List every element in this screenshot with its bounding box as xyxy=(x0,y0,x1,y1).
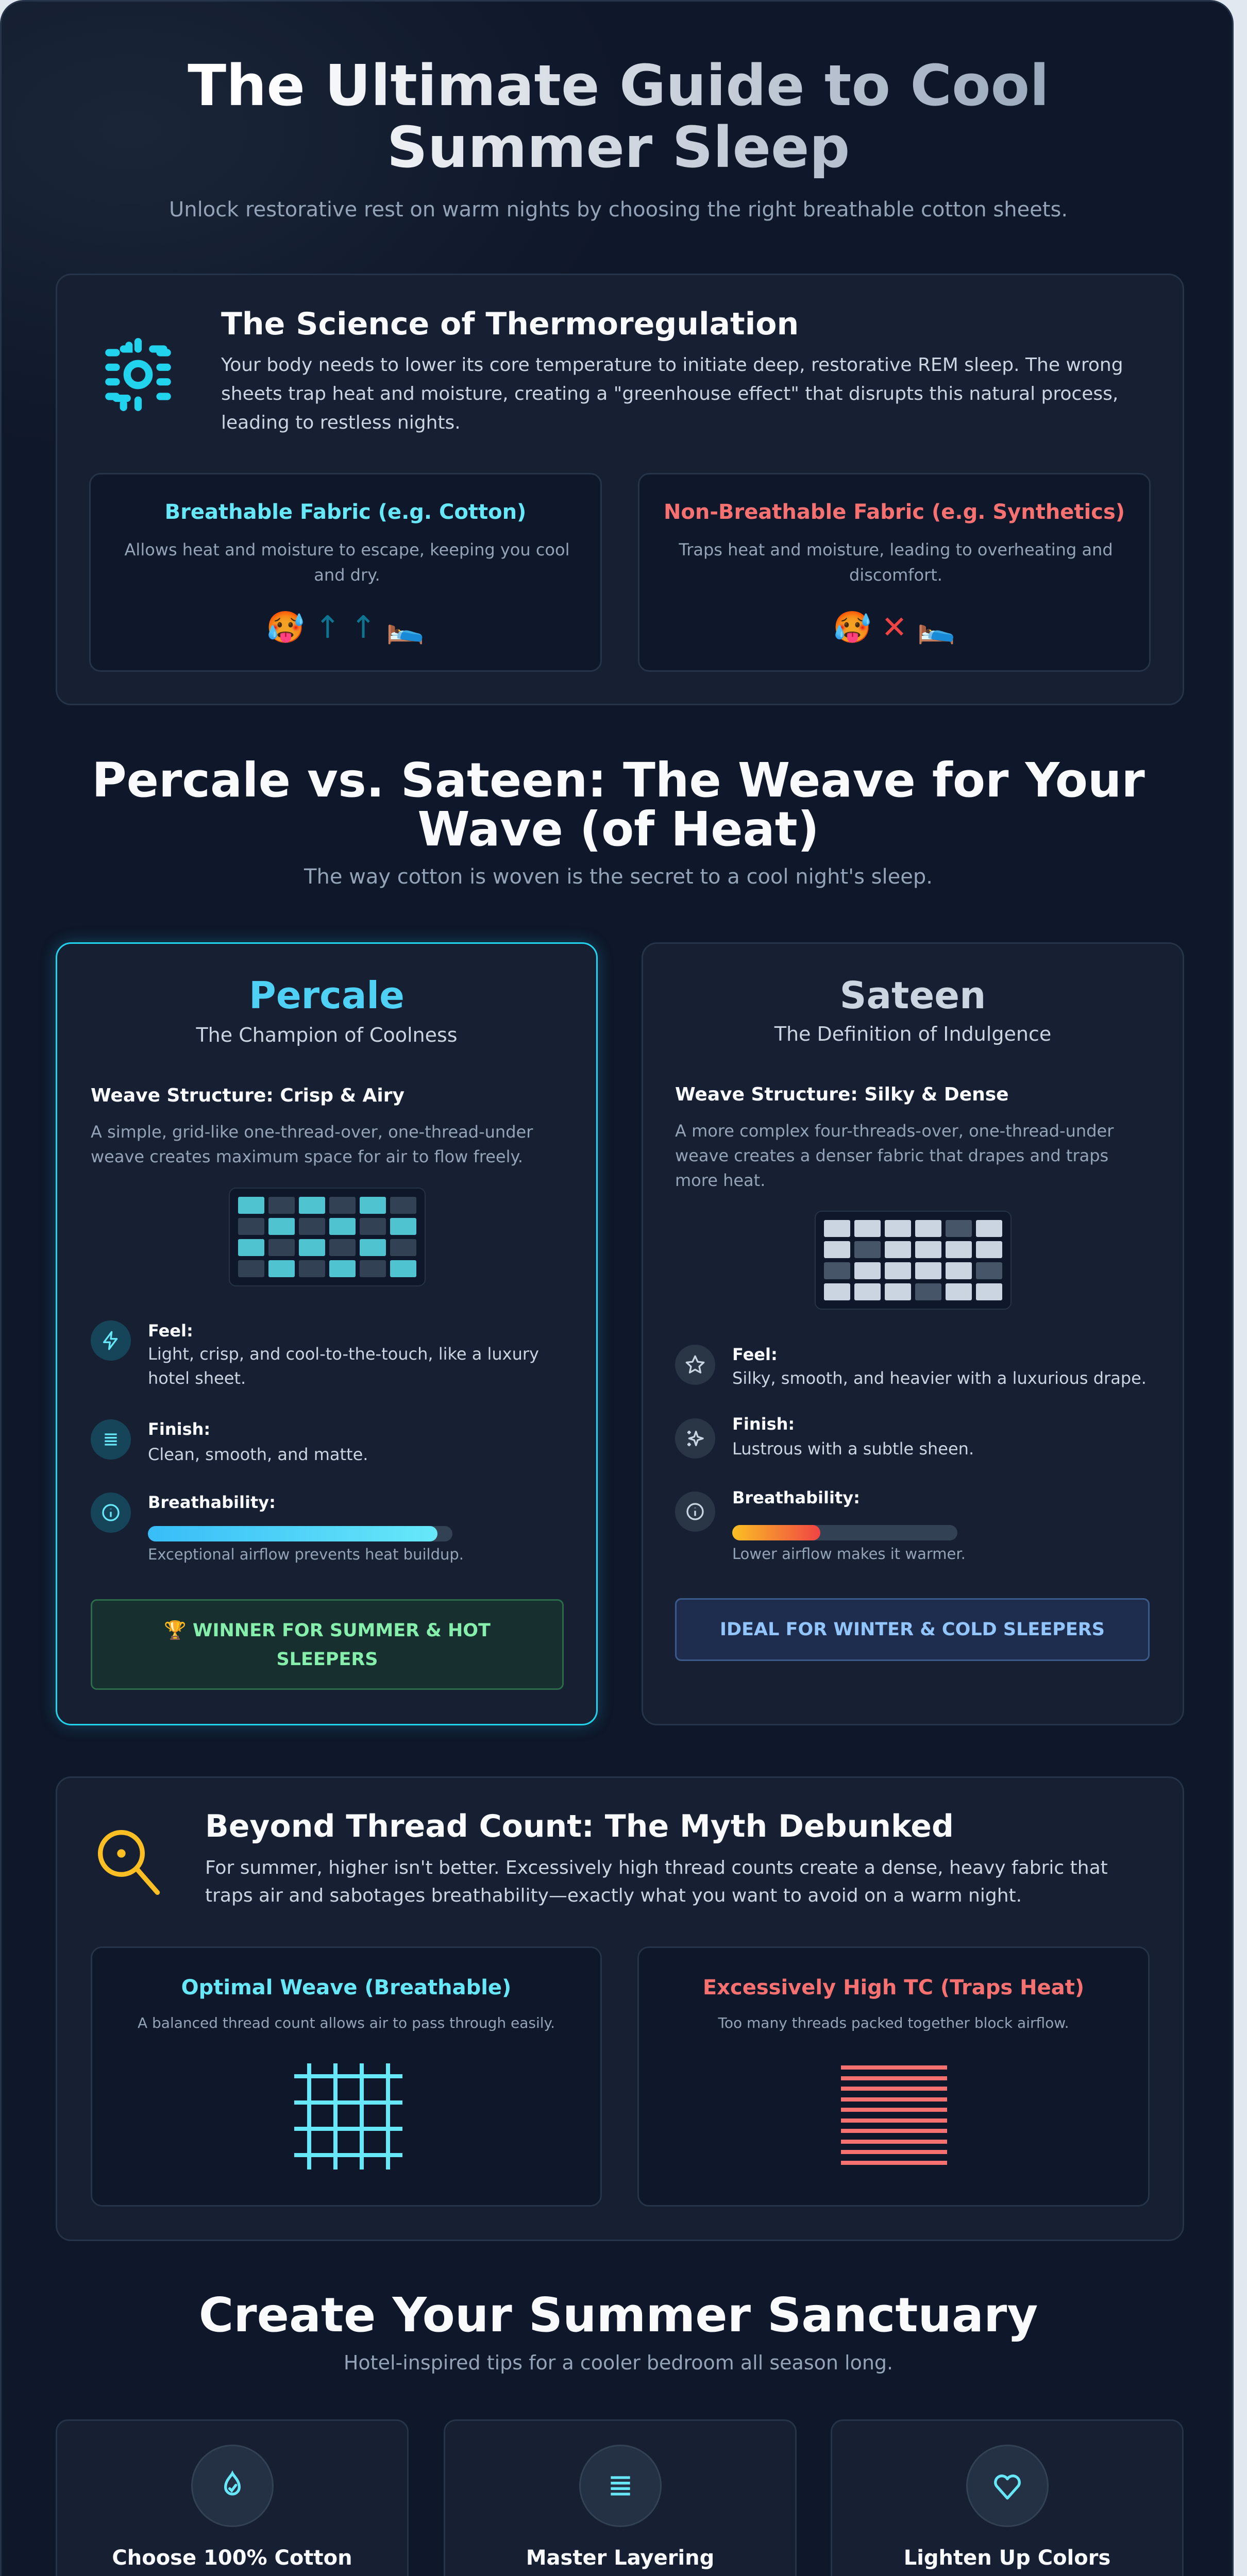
breathability xyxy=(91,1493,464,1563)
card: non-breathable xyxy=(638,473,1151,672)
tip: colors: Lighten Up Colors xyxy=(904,2546,1110,2570)
card: optimal: A balanced thread count allows air to pass through easily. xyxy=(138,2014,555,2031)
icon: magnifier xyxy=(98,1830,160,1895)
title: Summer Sleep xyxy=(387,114,850,180)
section title: percale vs sateen: Percale vs. Sateen: The Weave for Your xyxy=(92,753,1145,808)
heading: The Science of Thermoregulation xyxy=(221,306,799,342)
panel: percale: A simple, grid-like one-thread-over, one-thread-under weave creates maximum space for air to flow freely. xyxy=(91,1122,533,1166)
breathability: Lower airflow makes it warmer. xyxy=(732,1545,966,1563)
section subtitle: Hotel-inspired tips for a cooler bedroom all season long. xyxy=(344,2351,893,2374)
card: non-breathable: Traps heat and moisture, leading to overheating and discomfort. xyxy=(679,540,1113,585)
section title: sanctuary: Create Your Summer Sanctuary xyxy=(199,2287,1038,2343)
panel: sateen: A more complex four-threads-over, one-thread-under weave creates a denser fabric that drapes and traps more heat. xyxy=(675,1121,1114,1190)
badge: winner: 🏆 WINNER FOR SUMMER & HOT xyxy=(164,1620,491,1641)
subtitle: Unlock restorative rest on warm nights by choosing the right breathable cotton sheets. xyxy=(169,198,1068,222)
breathability xyxy=(675,1488,966,1563)
card: optimal xyxy=(91,1946,602,2207)
card: non-breathable: Non-Breathable Fabric (e.g. Synthetics) xyxy=(664,500,1125,524)
feel xyxy=(91,1320,539,1388)
section title: percale vs sateen xyxy=(92,753,1145,857)
dense lines illustration xyxy=(841,2065,947,2165)
feel: Feel: xyxy=(732,1345,778,1364)
title: The Ultimate Guide to Cool xyxy=(188,53,1049,118)
badge: winner: SLEEPERS xyxy=(276,1649,378,1670)
finish: Lustrous with a subtle sheen. xyxy=(732,1439,974,1459)
panel: percale: Percale xyxy=(249,974,405,1017)
card: breathable: Allows heat and moisture to escape, keeping you cool and dry. xyxy=(125,540,569,585)
weave grid: sateen xyxy=(815,1211,1012,1310)
feel: Silky, smooth, and heavier with a luxurious drape. xyxy=(732,1368,1147,1388)
breathability: Breathability: xyxy=(732,1488,860,1507)
panel: sateen xyxy=(642,942,1184,1725)
weave grid: percale xyxy=(229,1188,426,1286)
finish: Clean, smooth, and matte. xyxy=(148,1445,368,1464)
tip: layering xyxy=(444,2419,797,2576)
card: high tc: Excessively High TC (Traps Heat) xyxy=(703,1976,1084,1999)
grid illustration xyxy=(294,2063,402,2170)
tip: cotton: Choose 100% Cotton xyxy=(112,2546,352,2570)
section title: percale vs sateen: Wave (of Heat) xyxy=(417,802,819,857)
tip: cotton xyxy=(56,2419,409,2576)
panel: percale xyxy=(56,942,598,1725)
icon: thermo chip xyxy=(105,338,171,411)
panel: sateen: The Definition of Indulgence xyxy=(774,1023,1051,1045)
feel xyxy=(675,1345,1147,1388)
body: For summer, higher isn't better. Excessively high thread counts create a dense, heavy fabric that traps air and sabotages breathability—exactly what you want to avoid on a warm night. xyxy=(205,1857,1108,1906)
panel: sateen: Weave Structure: Silky & Dense xyxy=(675,1084,1009,1105)
icon row: 🥵 ✕ 🛌 xyxy=(833,609,955,646)
panel: percale: Weave Structure: Crisp & Airy xyxy=(91,1085,405,1106)
title xyxy=(2,55,1235,178)
heading: Beyond Thread Count: The Myth Debunked xyxy=(205,1808,954,1844)
card: high tc: Too many threads packed together block airflow. xyxy=(718,2014,1069,2031)
tip: colors xyxy=(831,2419,1184,2576)
panel: percale: The Champion of Coolness xyxy=(196,1024,458,1046)
panel: sateen: Sateen xyxy=(840,974,986,1017)
card: breathable: Breathable Fabric (e.g. Cotton) xyxy=(165,500,526,524)
card: high tc xyxy=(637,1946,1150,2207)
breathability: Breathability: xyxy=(148,1493,276,1512)
card: optimal: Optimal Weave (Breathable) xyxy=(181,1976,511,1999)
breathability: Exceptional airflow prevents heat buildup. xyxy=(148,1546,464,1563)
finish xyxy=(91,1419,368,1464)
section subtitle: The way cotton is woven is the secret to a cool night's sleep. xyxy=(304,865,933,889)
finish xyxy=(675,1414,974,1459)
panel: thread count xyxy=(56,1776,1184,2241)
icon row: 🥵 ↑ ↑ 🛌 xyxy=(266,609,425,646)
badge: ideal xyxy=(675,1598,1150,1661)
body text: Your body needs to lower its core temperature to initiate deep, restorative REM sleep. The wrong sheets trap heat and moisture, creating a "greenhouse effect" that disrupts this natural process, leading to restless nights. xyxy=(221,354,1123,433)
feel: Feel: xyxy=(148,1321,193,1341)
tip: layering: Master Layering xyxy=(526,2546,714,2570)
finish: Finish: xyxy=(732,1414,795,1434)
feel: Light, crisp, and cool-to-the-touch, like a luxury hotel sheet. xyxy=(148,1344,539,1388)
badge: ideal: IDEAL FOR WINTER & COLD SLEEPERS xyxy=(720,1619,1105,1640)
badge: winner xyxy=(91,1599,564,1690)
panel: thermoregulation xyxy=(56,274,1184,705)
card: breathable xyxy=(89,473,602,672)
finish: Finish: xyxy=(148,1419,210,1439)
